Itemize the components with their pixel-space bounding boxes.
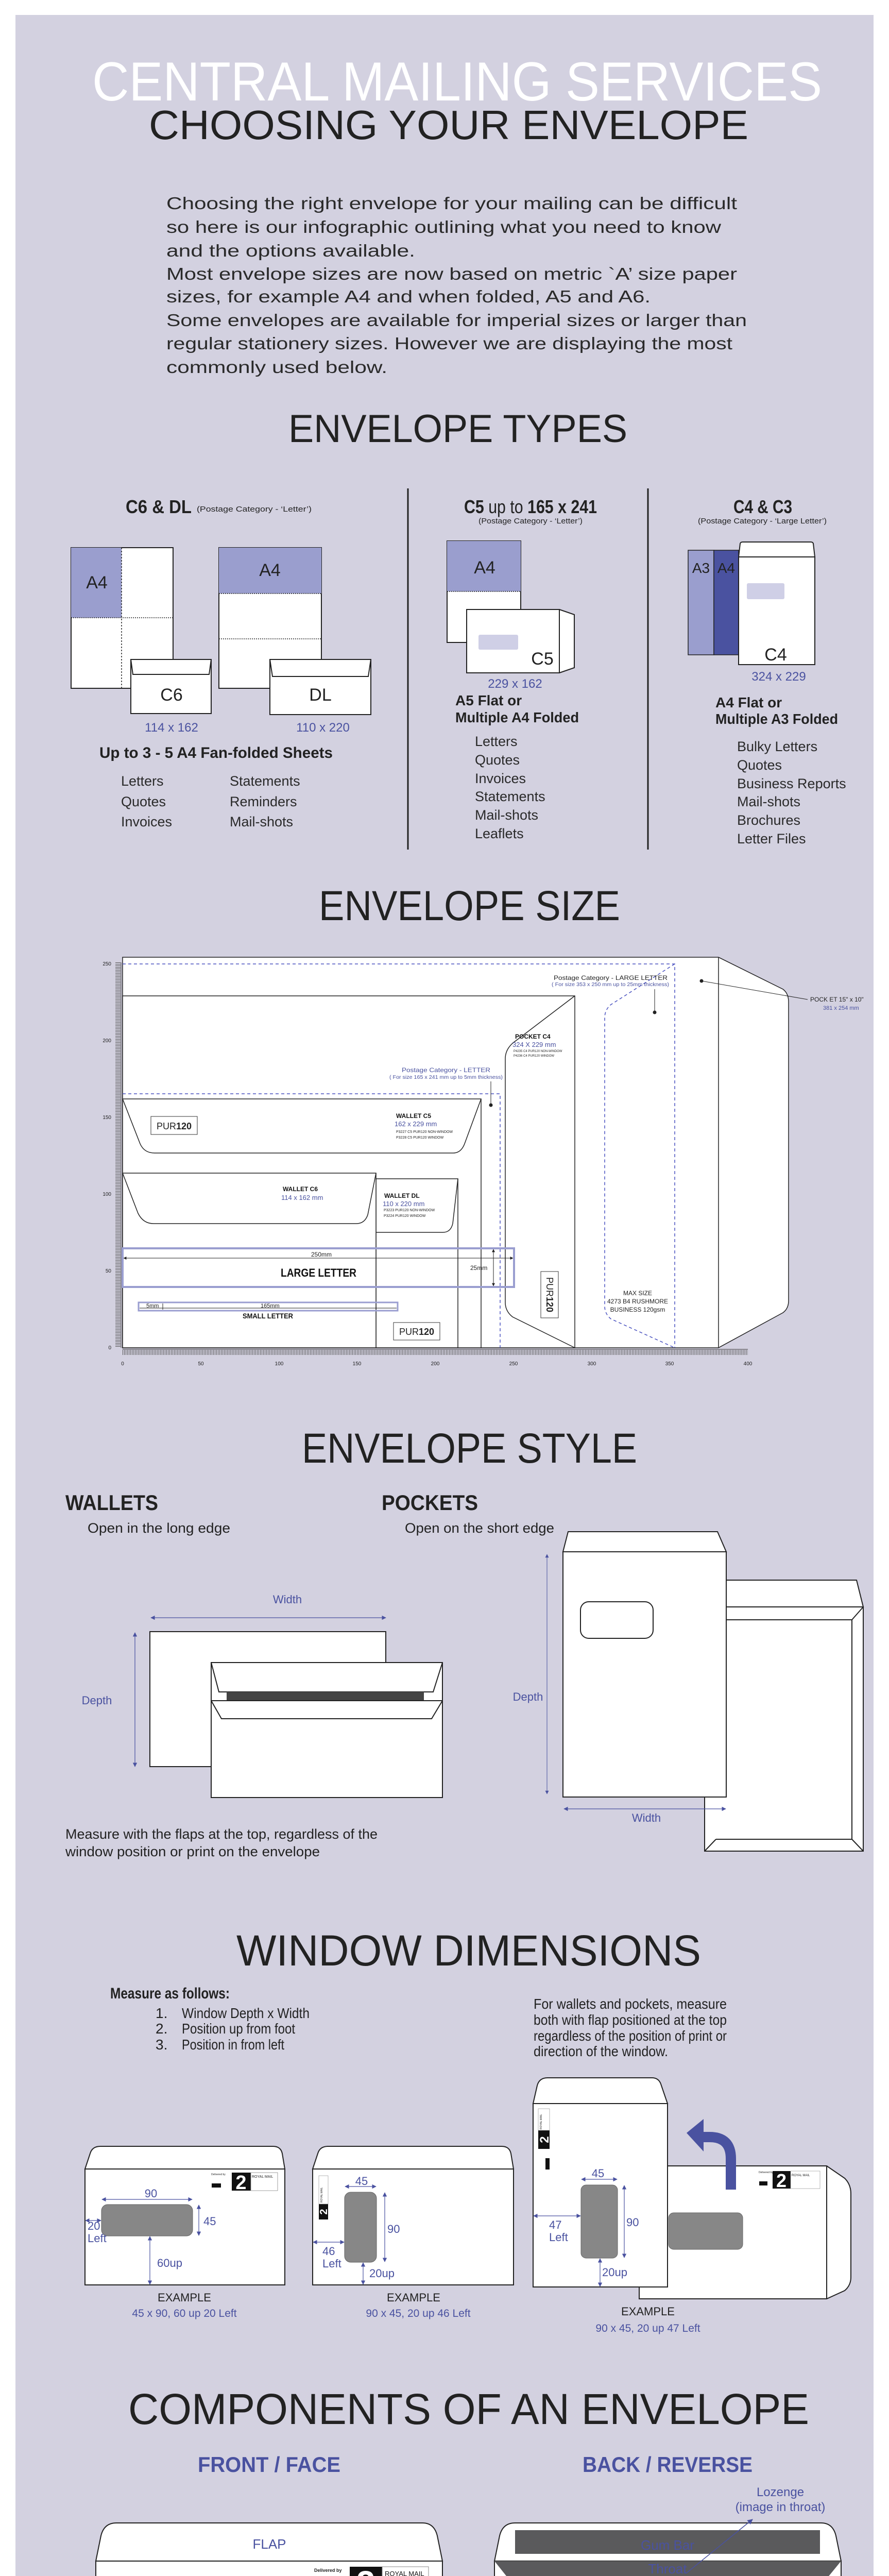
wallet dimension arrows	[82, 1593, 386, 1767]
uses list: Statements	[230, 773, 300, 789]
intro text: and the options available.	[166, 241, 415, 260]
axes and rulers: 200	[102, 1038, 111, 1044]
chart labels: 324 X 229 mm	[512, 1041, 556, 1048]
large letter box: LARGE LETTER	[281, 1266, 356, 1279]
example 3: pocket and wallet: 90 x 45, 20 up 47 Left	[595, 2323, 700, 2334]
chart labels: WALLET C6	[283, 1185, 318, 1193]
wallet drawing	[150, 1632, 442, 1798]
text: measure as follows: 2.	[156, 2021, 167, 2037]
indicia: ROYAL MAIL	[252, 2175, 273, 2179]
heading C4 & C3: (Postage Category - ‘Large Letter’)	[698, 517, 827, 526]
indicia: Delivered by	[211, 2173, 226, 2176]
axes and rulers: 100	[275, 1361, 284, 1367]
envelope: wallet C5	[123, 1099, 481, 1348]
example 2: portrait window in wallet: 90	[387, 2223, 400, 2235]
back wallet: ROYAL MAIL	[792, 2174, 810, 2177]
measure note: Measure with the flaps at the top, regardless of the	[65, 1826, 378, 1842]
uses list C4: Letter Files	[737, 831, 806, 846]
wallets heading: Open in the long edge	[88, 1520, 230, 1536]
intro text: regular stationery sizes. However we are displaying the most	[166, 334, 732, 353]
uses list: Mail-shots	[230, 814, 293, 829]
chart labels: POCKET C4	[515, 1033, 551, 1040]
chart labels: P4235 C4 PUR120 NON-WINDOW	[514, 1050, 562, 1053]
indicia: Delivered by	[314, 2568, 342, 2573]
chart labels: P3224 PUR120 WINDOW	[384, 1214, 426, 1218]
capacity note: Up to 3 - 5 A4 Fan-folded Sheets	[99, 744, 333, 761]
wallets heading	[65, 1490, 230, 1536]
front pocket: Left	[549, 2231, 568, 2244]
small letter box: 165mm	[261, 1303, 280, 1309]
subheading: front / face: FRONT / FACE	[198, 2452, 340, 2477]
text: wallets and pockets note: For wallets and pockets, measure	[534, 1996, 727, 2012]
example 1: landscape window: 45 x 90, 60 up 20 Left	[132, 2308, 237, 2319]
indicia	[211, 2172, 278, 2194]
axes and rulers: 250	[509, 1361, 518, 1367]
label: lozenge: (image in throat)	[736, 2500, 825, 2514]
wallet dimension arrows: Width	[273, 1593, 302, 1606]
axes and rulers: 400	[744, 1361, 753, 1367]
text: measure as follows: Position up from foot	[182, 2021, 295, 2037]
heading C4 & C3	[698, 496, 827, 526]
chart labels: ( For size 165 x 241 mm up to 5mm thickness)	[389, 1075, 503, 1080]
DL envelope	[270, 659, 371, 715]
capacity C5: A5 Flat or	[455, 692, 522, 708]
envelope: pocket C4	[123, 996, 575, 1348]
uses list C4: Bulky Letters	[737, 739, 817, 754]
text: measure as follows: 1.	[156, 2005, 167, 2021]
C6 envelope	[131, 659, 211, 714]
intro text: Choosing the right envelope for your mailing can be difficult	[166, 194, 737, 213]
example 1: landscape window: 45	[203, 2215, 216, 2228]
pocket dimension arrows: Width	[632, 1811, 661, 1824]
chart labels: POCK ET 15" x 10"	[810, 996, 864, 1003]
axes and rulers: 350	[665, 1361, 674, 1367]
wallets heading: WALLETS	[65, 1490, 158, 1515]
envelope: wallet C6	[123, 1173, 376, 1348]
back wallet: 2	[776, 2170, 787, 2191]
heading C5: (Postage Category - ‘Letter’)	[478, 517, 583, 526]
measure note	[65, 1826, 378, 1859]
indicia rotated	[318, 2176, 330, 2219]
axes and rulers: 0	[108, 1345, 111, 1351]
text: measure as follows: Measure as follows:	[110, 1985, 230, 2002]
small letter box: SMALL LETTER	[243, 1312, 293, 1320]
panel: front envelope: FLAP	[252, 2536, 286, 2552]
uses list C4	[737, 739, 846, 846]
uses list: Reminders	[230, 794, 297, 809]
PUR120 labels: PUR120	[157, 1121, 192, 1131]
heading: envelope size: ENVELOPE SIZE	[319, 883, 620, 929]
subtitle: CHOOSING YOUR ENVELOPE	[149, 102, 748, 148]
chart labels: 381 x 254 mm	[823, 1005, 859, 1011]
chart labels: P3227 C5 PUR120 NON-WINDOW	[396, 1130, 453, 1134]
small letter box	[139, 1302, 398, 1320]
chart labels: Postage Category - LARGE LETTER	[554, 974, 668, 981]
text: wallets and pockets note: both with flap positioned at the top	[534, 2012, 727, 2028]
back wallet	[639, 2166, 851, 2299]
measure note: window position or print on the envelope	[65, 1844, 320, 1859]
panel: front envelope	[96, 2523, 442, 2576]
large letter box	[123, 1248, 514, 1287]
pocket dimension arrows: Depth	[513, 1690, 543, 1703]
axes and rulers: 0	[121, 1361, 124, 1367]
panel: pockets	[382, 1490, 863, 1851]
label: lozenge	[687, 2485, 825, 2573]
intro text: Most envelope sizes are now based on metric `A’ size paper	[166, 264, 737, 283]
heading C6 & DL: C6 & DL	[126, 496, 192, 517]
heading C5: C5 up to 165 x 241	[464, 496, 597, 517]
example 1: landscape window: EXAMPLE	[158, 2291, 211, 2304]
envelope: pocket 15 x 10	[123, 957, 789, 1348]
C6 envelope: C6	[160, 685, 183, 705]
heading C6 & DL	[126, 496, 312, 517]
heading: window dimensions: WINDOW DIMENSIONS	[236, 1926, 701, 1975]
A3 and A4 sheets: A4	[717, 560, 735, 576]
example 2: portrait window in wallet	[313, 2146, 514, 2319]
axes and rulers	[102, 961, 753, 1367]
text: wallets and pockets note: regardless of the position of print or	[534, 2028, 727, 2044]
uses list: Letters	[121, 773, 164, 789]
front pocket: 45	[592, 2167, 604, 2180]
capacity C5	[455, 692, 579, 725]
uses list C4: Mail-shots	[737, 794, 800, 809]
A4 sheet folded thirds: A4	[259, 561, 281, 580]
uses list: Invoices	[121, 814, 172, 829]
capacity C4	[715, 694, 838, 727]
A4 sheet folded thirds	[219, 548, 321, 688]
throat	[494, 2561, 841, 2576]
chart labels	[281, 974, 864, 1313]
heading C6 & DL: (Postage Category - ‘Letter’)	[197, 505, 312, 514]
chart labels: 4273 B4 RUSHMORE	[607, 1298, 668, 1305]
indicia rotated: ROYAL MAIL	[320, 2187, 323, 2202]
front pocket: 2	[538, 2136, 552, 2143]
large letter box: 250mm	[311, 1251, 332, 1258]
arrow: flip	[687, 2119, 731, 2190]
chart labels: P3228 C5 PUR120 WINDOW	[396, 1136, 444, 1140]
large letter box: 25mm	[470, 1264, 487, 1272]
axes and rulers: 250	[102, 961, 111, 967]
chart labels: 114 x 162 mm	[281, 1194, 323, 1201]
example 2: portrait window in wallet: Left	[322, 2257, 341, 2270]
pockets heading: Open on the short edge	[405, 1520, 554, 1536]
envelope: letter boundary dashed	[123, 1094, 500, 1348]
indicia: 2	[235, 2172, 247, 2194]
uses list C4: Quotes	[737, 757, 782, 773]
gum bar: Gum Bar	[641, 2537, 694, 2553]
DL envelope: DL	[309, 685, 332, 705]
chart: envelope size scale drawing	[102, 957, 864, 1367]
C4 envelope: C4	[764, 645, 787, 665]
panel: C4 & C3	[688, 496, 846, 846]
heading C5	[464, 496, 597, 526]
intro text	[166, 194, 747, 377]
gum bar	[515, 2530, 820, 2554]
panel: back envelope	[494, 2485, 841, 2576]
front pocket: 20up	[602, 2266, 627, 2279]
front pocket: 90	[626, 2216, 639, 2229]
A4 sheet half: A4	[474, 558, 495, 578]
sizes: 110 x 220	[296, 721, 350, 735]
label: lozenge: Lozenge	[757, 2485, 804, 2499]
envelope: wallet DL	[376, 1179, 458, 1348]
capacity C4: Multiple A3 Folded	[715, 711, 838, 727]
A4 sheet half	[447, 541, 521, 642]
axes and rulers: 300	[588, 1361, 596, 1367]
heading: envelope style: ENVELOPE STYLE	[302, 1425, 637, 1472]
heading: envelope types: ENVELOPE TYPES	[288, 407, 627, 451]
example 1: landscape window: Left	[88, 2232, 107, 2245]
A3 and A4 sheets	[688, 550, 739, 655]
uses list C5: Invoices	[475, 771, 526, 786]
back pocket	[705, 1580, 863, 1851]
capacity C4: A4 Flat or	[715, 694, 782, 710]
chart labels: WALLET DL	[384, 1192, 420, 1199]
small letter box: 5mm	[146, 1303, 159, 1309]
chart labels: Postage Category - LETTER	[402, 1066, 490, 1074]
front pocket: ROYAL MAIL	[540, 2114, 543, 2129]
example 2: portrait window in wallet: 45	[355, 2175, 368, 2188]
A4 sheet folded quarters	[71, 548, 173, 688]
chart labels: MAX SIZE	[623, 1290, 652, 1297]
A4 sheet folded quarters: A4	[86, 573, 108, 592]
axes and rulers: 50	[198, 1361, 204, 1367]
chart labels: 162 x 229 mm	[395, 1120, 437, 1128]
uses list C5: Quotes	[475, 752, 520, 768]
text: measure as follows: Window Depth x Width	[182, 2005, 310, 2021]
A3 and A4 sheets: A3	[692, 560, 710, 576]
pockets heading	[382, 1490, 554, 1536]
heading: components of an envelope: COMPONENTS OF AN ENVELOPE	[128, 2385, 809, 2433]
axes and rulers: 50	[106, 1268, 111, 1274]
intro text: Some envelopes are available for imperial sizes or larger than	[166, 311, 747, 330]
chart labels: BUSINESS 120gsm	[610, 1306, 665, 1313]
envelope: large letter boundary dashed	[123, 964, 675, 1348]
example 3: pocket and wallet: EXAMPLE	[621, 2305, 675, 2318]
heading C4 & C3: C4 & C3	[733, 496, 792, 517]
example 1: landscape window	[85, 2146, 285, 2319]
back wallet: Delivered by	[759, 2171, 773, 2174]
panel: C5	[447, 496, 597, 841]
sizes: 114 x 162	[145, 721, 198, 735]
text: wallets and pockets note	[534, 1996, 727, 2059]
front pocket: 47	[549, 2218, 561, 2231]
front pocket	[563, 1532, 726, 1797]
wallet dimension arrows: Depth	[82, 1694, 112, 1707]
uses list C5: Letters	[475, 734, 518, 749]
intro text: commonly used below.	[166, 358, 387, 377]
uses list C5: Leaflets	[475, 826, 524, 841]
intro text: so here is our infographic outlining what you need to know	[166, 217, 721, 236]
axes and rulers: 150	[353, 1361, 362, 1367]
C5 envelope	[467, 609, 574, 673]
example 2: portrait window in wallet: 90 x 45, 20 up 46 Left	[366, 2308, 471, 2319]
axes and rulers: 200	[431, 1361, 440, 1367]
example 1: landscape window: 90	[145, 2187, 157, 2200]
front pocket	[533, 2078, 668, 2287]
axes and rulers: 150	[102, 1115, 111, 1121]
uses list C5: Statements	[475, 789, 545, 804]
text: measure as follows	[110, 1985, 310, 2053]
chart labels: 110 x 220 mm	[383, 1200, 424, 1208]
capacity C5: Multiple A4 Folded	[455, 709, 579, 725]
example 1: landscape window: 20	[88, 2219, 100, 2232]
uses list C4: Brochures	[737, 812, 800, 828]
PUR120 labels: PUR 120	[544, 1277, 555, 1312]
example 2: portrait window in wallet: EXAMPLE	[387, 2291, 440, 2304]
indicia rotated: 2	[318, 2209, 330, 2215]
chart labels: P3223 PUR120 NON-WINDOW	[384, 1209, 435, 1212]
uses list C5	[475, 734, 545, 841]
divider lines	[408, 488, 648, 850]
pocket dimension arrows	[513, 1554, 726, 1824]
example 1: landscape window: 60up	[157, 2257, 182, 2269]
text: measure as follows: Position in from left	[182, 2037, 284, 2053]
subheading: back / reverse: BACK / REVERSE	[583, 2452, 753, 2477]
uses list: Quotes	[121, 794, 166, 809]
chart labels: ( For size 353 x 250 mm up to 25mm thickness)	[552, 982, 669, 988]
text: measure as follows: 3.	[156, 2037, 167, 2053]
uses list C4: Business Reports	[737, 776, 846, 791]
example 2: portrait window in wallet: 20up	[369, 2267, 395, 2280]
size C4: 324 x 229	[751, 670, 806, 684]
PUR120 labels	[151, 1116, 558, 1340]
example 2: portrait window in wallet: 46	[322, 2245, 335, 2258]
size C5: 229 x 162	[488, 677, 542, 691]
PUR120 labels: PUR120	[399, 1327, 434, 1337]
uses list	[121, 773, 300, 829]
text: wallets and pockets note: direction of the window.	[534, 2043, 668, 2059]
chart labels: WALLET C5	[396, 1112, 431, 1120]
uses list C5: Mail-shots	[475, 807, 538, 823]
panel: wallets	[65, 1490, 442, 1859]
pockets heading: POCKETS	[382, 1490, 478, 1515]
C5 envelope: C5	[531, 649, 554, 669]
axes and rulers: 100	[102, 1192, 111, 1197]
sizes	[145, 721, 350, 735]
intro text: sizes, for example A4 and when folded, A5 and A6.	[166, 287, 651, 306]
example 3: pocket and wallet	[533, 2078, 851, 2334]
C4 envelope	[739, 542, 815, 665]
indicia	[314, 2564, 429, 2576]
chart labels: P4236 C4 PUR120 WINDOW	[514, 1055, 554, 1058]
panel: C6 & DL	[71, 496, 371, 829]
title: CENTRAL MAILING SERVICES	[92, 50, 822, 112]
